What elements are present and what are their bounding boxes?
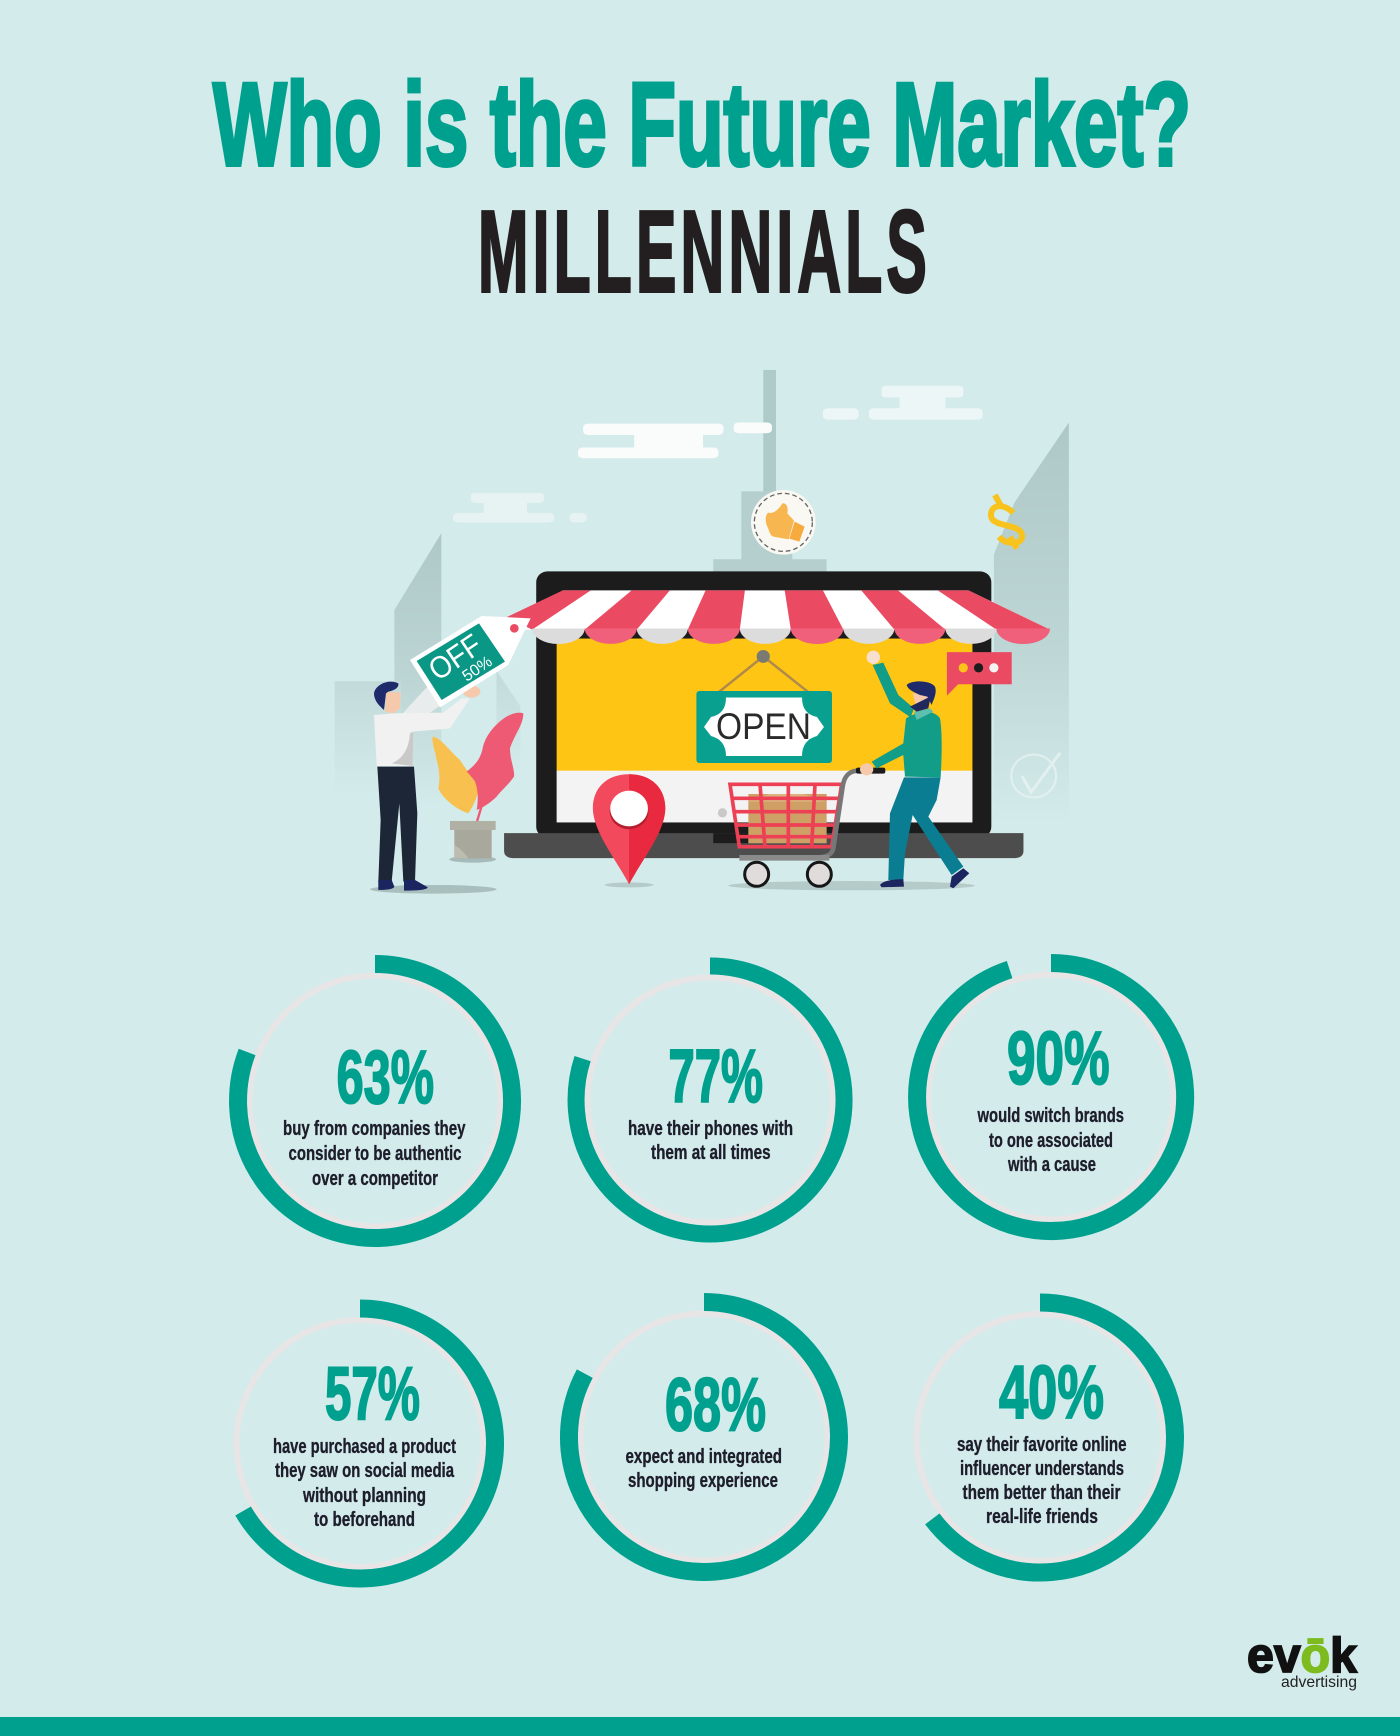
open sign board	[696, 691, 832, 763]
stat ring: 90%: to one associated	[989, 1129, 1113, 1152]
logo: evok advertising: advertising	[1281, 1674, 1357, 1691]
stat ring: 40%: them better than their	[962, 1481, 1121, 1504]
discount tag	[410, 616, 531, 707]
stat ring: 57%: 57%	[325, 1352, 420, 1436]
open sign hanger	[714, 650, 813, 696]
footer bar	[0, 1717, 1400, 1736]
stat ring: 63%: buy from companies they	[283, 1117, 466, 1140]
stat ring: 90%: would switch brands	[977, 1104, 1124, 1127]
stat ring: 68%: shopping experience	[628, 1469, 778, 1492]
person pushing cart	[860, 651, 969, 888]
stat ring: 68%: expect and integrated	[626, 1445, 782, 1468]
clouds	[453, 386, 983, 522]
icon: dollar sign	[991, 495, 1022, 549]
stat ring: 63%: consider to be authentic	[288, 1142, 462, 1165]
stat ring: 57%: to beforehand	[314, 1508, 415, 1531]
stat ring: 77%: have their phones with	[628, 1117, 793, 1140]
stat ring: 40%: real-life friends	[986, 1505, 1098, 1528]
logo: evok advertising: evōk	[1247, 1629, 1358, 1683]
laptop	[504, 571, 1023, 858]
stat ring: 77%	[576, 966, 844, 1234]
open sign text: OPEN	[716, 706, 811, 747]
person holding discount tag	[370, 682, 497, 894]
stat ring: 57%: without planning	[302, 1484, 426, 1507]
stat ring: 57%: they saw on social media	[275, 1459, 454, 1482]
stat ring: 90%	[917, 963, 1185, 1231]
stat ring: 63%: 63%	[337, 1035, 434, 1119]
location pin	[593, 774, 665, 887]
check mark badge	[1011, 753, 1060, 797]
stat ring: 57%	[236, 1308, 495, 1578]
discount tag: OFF	[422, 627, 488, 687]
stat ring: 63%	[238, 964, 512, 1238]
stat ring: 40%: influencer understands	[960, 1457, 1124, 1480]
illustration: online storefront	[335, 370, 1069, 894]
stat ring: 68%: 68%	[665, 1362, 766, 1446]
stat ring: 90%: 90%	[1007, 1016, 1110, 1100]
stat ring: 40%	[916, 1302, 1175, 1572]
stat ring: 57%: have purchased a product	[273, 1435, 456, 1458]
background city buildings	[335, 370, 1069, 824]
shopping cart	[728, 768, 975, 890]
stat ring: 77%: 77%	[668, 1034, 763, 1118]
stat ring: 90%: with a cause	[1007, 1153, 1096, 1176]
subtitle: millennials: MILLENNIALS	[478, 186, 931, 316]
icon: thumbs up badge	[751, 490, 816, 555]
discount tag: 50%	[459, 653, 496, 685]
stat ring: 63%: over a competitor	[312, 1167, 438, 1190]
stat ring: 40%: say their favorite online	[957, 1433, 1126, 1456]
stat ring: 77%: them at all times	[651, 1141, 771, 1164]
plant	[432, 713, 523, 863]
stat ring: 68%	[569, 1302, 839, 1572]
stat ring: 40%: 40%	[999, 1350, 1104, 1434]
speech bubble	[947, 652, 1012, 696]
awning	[507, 590, 1050, 644]
